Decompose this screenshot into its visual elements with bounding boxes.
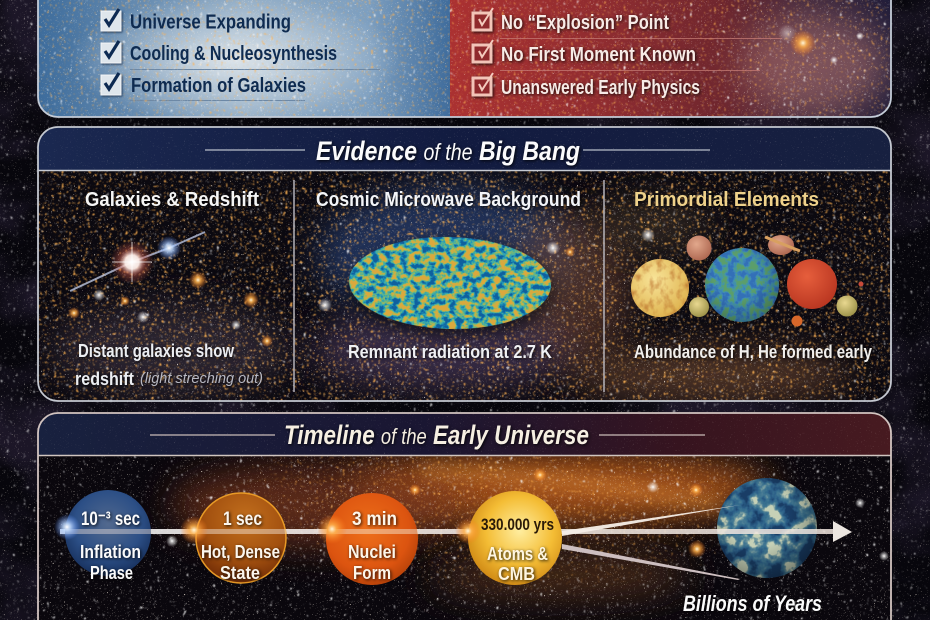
arrow: timeline axis	[60, 505, 852, 580]
check item: Unanswered Early Physics: Unanswered Early Physics	[501, 77, 700, 99]
check item: Universe Expanding	[101, 9, 291, 34]
panel: evidence of the big bang	[38, 127, 891, 401]
node: 1 sec hot dense state: Hot, Dense	[201, 542, 280, 562]
caption: Abundance of H, He formed early: Abundance of H, He formed early	[634, 342, 872, 362]
check item: Formation of Galaxies: Formation of Galaxies	[131, 75, 306, 97]
heading: Evidence of the Big Bang: Evidence of the Big Bang	[316, 136, 580, 166]
node: 3 min nuclei form: Nuclei	[348, 542, 396, 562]
column: primordial elements	[631, 189, 872, 362]
header bar: timeline	[38, 413, 891, 455]
illustration: CMB oval map	[318, 234, 575, 336]
label: Billions of Years: Billions of Years	[683, 591, 822, 616]
check item: Cooling and Nucleosynthesis: Cooling & Nucleosynthesis	[130, 43, 337, 65]
caption: Distant galaxies show redshift	[75, 341, 263, 389]
node: 1 sec hot dense state	[180, 493, 286, 583]
panel: explains (blue side)	[38, 0, 450, 117]
node: 10^-3 sec inflation phase: Phase	[90, 563, 133, 583]
check item: Universe Expanding: Universe Expanding	[130, 12, 291, 34]
check item: No Explosion Point	[473, 8, 669, 34]
node: 3 min nuclei form: Form	[353, 563, 391, 583]
node: 1 sec hot dense state: State	[220, 563, 260, 583]
check item: Cooling and Nucleosynthesis	[101, 41, 337, 65]
node: 1 sec hot dense state: 1 sec	[223, 509, 262, 530]
caption: Remnant radiation at 2.7 K: Remnant radiation at 2.7 K	[348, 342, 552, 362]
subheading: Primordial Elements: Primordial Elements	[634, 189, 819, 211]
panel: what the theory explains and does not explain	[38, 0, 891, 117]
planet: Earth at billions of years	[717, 478, 817, 578]
subheading: Galaxies and Redshift: Galaxies & Redshift	[85, 189, 259, 211]
node: 330,000 yrs atoms and CMB	[455, 491, 562, 585]
panel: timeline of the early universe	[38, 413, 891, 620]
subheading: Cosmic Microwave Background: Cosmic Microwave Background	[316, 189, 581, 211]
check item: No First Moment Known	[473, 40, 696, 66]
header bar: evidence	[38, 127, 891, 170]
node: 330,000 yrs atoms and CMB: CMB	[498, 564, 535, 584]
node: 3 min nuclei form	[317, 493, 418, 585]
caption: Distant galaxies show redshift: Distant galaxies show	[78, 341, 235, 361]
check item: Formation of Galaxies	[101, 73, 306, 97]
node: 330,000 yrs atoms and CMB: Atoms &	[487, 544, 548, 564]
caption: Distant galaxies show redshift: (light streching out)	[140, 370, 263, 387]
column: cosmic microwave background	[316, 189, 581, 362]
node: 10^-3 sec inflation phase	[54, 490, 151, 583]
panel: does not explain (red side)	[450, 0, 891, 117]
node: 10^-3 sec inflation phase: Inflation	[80, 542, 141, 562]
check item: No First Moment Known: No First Moment Known	[501, 44, 696, 66]
caption: Distant galaxies show redshift: redshift	[75, 369, 134, 389]
node: 330,000 yrs atoms and CMB: 330.000 yrs	[481, 515, 554, 534]
heading: Timeline of the Early Universe: Timeline of the Early Universe	[284, 420, 589, 450]
column: galaxies and redshift	[68, 189, 273, 389]
node: 10^-3 sec inflation phase: 10⁻³ sec	[81, 509, 140, 530]
check item: Unanswered Early Physics	[473, 73, 700, 99]
illustration: planets	[631, 228, 864, 326]
check item: No Explosion Point: No “Explosion” Point	[501, 12, 669, 34]
node: 3 min nuclei form: 3 min	[352, 509, 397, 530]
illustration: galaxy streak with stars	[68, 232, 273, 347]
